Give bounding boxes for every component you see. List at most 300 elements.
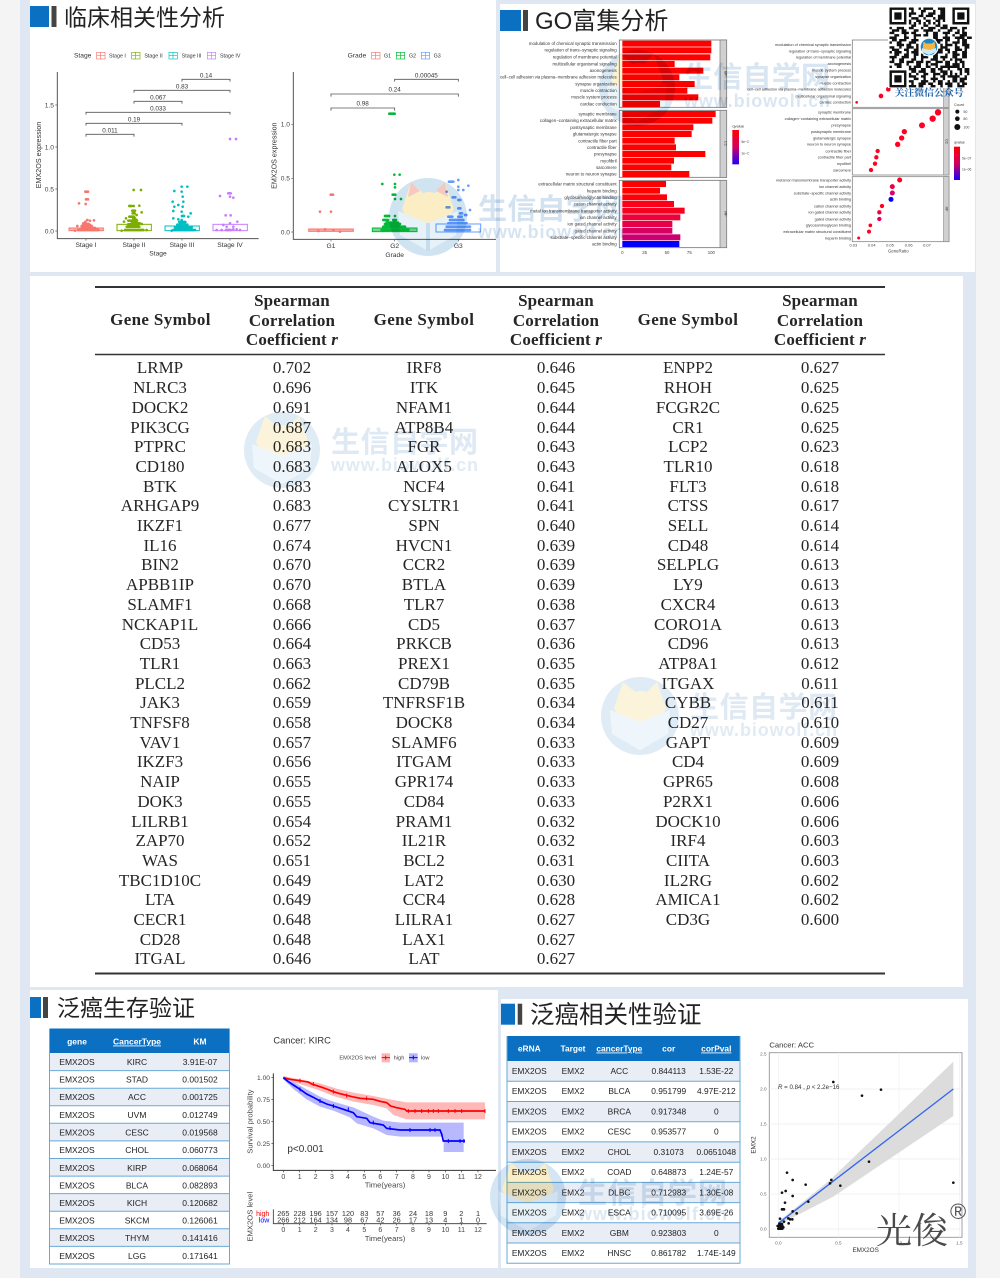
legend: expression level: EMX2OS level xyxy=(339,1056,376,1062)
table: Spearman correlation of EMX2OS genes: CD3G xyxy=(666,910,710,929)
table: Spearman correlation of EMX2OS genes: 0.627 xyxy=(537,910,575,929)
table: survival KM p values: 0.001725 xyxy=(182,1092,218,1102)
table: Spearman correlation of EMX2OS genes: 0.648 xyxy=(273,930,311,949)
chart: GO bar plot: 50 xyxy=(665,250,670,255)
table: eRNA target correlation: 0.923803 xyxy=(651,1228,687,1238)
chart: ACC scatter plot: EMX2 xyxy=(751,1136,758,1154)
table: eRNA target correlation: CHOL xyxy=(608,1147,631,1157)
table: Spearman correlation of EMX2OS genes: CYSLTR1 xyxy=(388,496,460,515)
risk table: 157 xyxy=(326,1209,338,1218)
table: Spearman correlation of EMX2OS genes: Gene Symbol xyxy=(110,310,211,329)
risk table: 5 xyxy=(362,1227,366,1234)
table: Spearman correlation of EMX2OS genes: TLR7 xyxy=(404,595,444,614)
bar labels: regulation of trans−synaptic signaling xyxy=(545,48,617,53)
strip labels: MF xyxy=(724,211,728,217)
risk table xyxy=(245,1191,487,1243)
table: Spearman correlation of EMX2OS genes: 0.638 xyxy=(537,595,575,614)
table: Spearman correlation of EMX2OS genes: 0.633 xyxy=(537,733,575,752)
chart: KIRC survival curve: 12 xyxy=(474,1174,482,1181)
table: eRNA target correlation: Target xyxy=(561,1044,586,1054)
table: Spearman correlation of EMX2OS genes: 0.609 xyxy=(801,752,839,771)
table: survival KM p values: ACC xyxy=(128,1092,146,1102)
curve: low xyxy=(283,1078,465,1141)
risk table: 18 xyxy=(425,1209,433,1218)
QR code xyxy=(888,6,972,99)
table: Spearman correlation of EMX2OS genes: 0.613 xyxy=(801,555,839,574)
table: Spearman correlation of EMX2OS genes: PIK3CG xyxy=(130,418,190,436)
table: Spearman correlation of EMX2OS genes: 0.611 xyxy=(801,674,839,693)
table: Spearman correlation of EMX2OS genes: ATP8A1 xyxy=(658,654,718,673)
table: Spearman correlation of EMX2OS genes: CCR2 xyxy=(403,555,445,574)
table: Spearman correlation of EMX2OS genes: JAK3 xyxy=(140,693,180,712)
risk table: Time(years) xyxy=(365,1234,406,1243)
table: eRNA target correlation: EMX2OS xyxy=(512,1248,547,1258)
table: Spearman correlation of EMX2OS genes: SELPLG xyxy=(657,555,719,574)
table: eRNA target correlation: EMX2 xyxy=(562,1187,585,1197)
chart: ACC scatter plot: 1.0 xyxy=(896,1240,903,1245)
chart: ACC scatter plot: EMX2OS xyxy=(852,1247,879,1254)
chart: EMX2OS expression by stage: 0.19 xyxy=(128,117,141,124)
table: eRNA target correlation: cancerType xyxy=(596,1044,643,1054)
dot labels: synaptic membrane xyxy=(818,111,851,115)
table: survival KM p values: EMX2OS xyxy=(59,1198,95,1208)
table: Spearman correlation of EMX2OS genes: 0.634 xyxy=(537,713,575,732)
table: Spearman correlation of EMX2OS genes: ALOX5 xyxy=(396,457,452,476)
table: survival KM p values: EMX2OS xyxy=(59,1128,95,1138)
bars: biological process xyxy=(622,41,711,107)
table: eRNA target correlation: COAD xyxy=(607,1167,631,1177)
table: Spearman correlation of EMX2OS genes: LY9 xyxy=(673,575,703,594)
table: Spearman correlation of EMX2OS genes: 0.655 xyxy=(273,772,311,791)
table: eRNA target correlation: 0.953577 xyxy=(651,1127,687,1137)
table: Spearman correlation of EMX2OS genes: 0.613 xyxy=(801,634,839,653)
dot labels: contractile fiber part xyxy=(818,156,852,160)
bar labels: myofibril xyxy=(600,158,617,163)
table: eRNA target correlation: eRNA xyxy=(518,1044,541,1054)
risk table: 3 xyxy=(330,1227,334,1234)
table: Spearman correlation of EMX2OS genes: IL21R xyxy=(402,831,446,850)
legend: count: Count xyxy=(954,103,964,107)
chart: ACC scatter plot: Cancer: ACC xyxy=(769,1041,814,1050)
dot labels: axonogenesis xyxy=(828,62,851,66)
table: Spearman correlation of EMX2OS genes: RHOH xyxy=(664,378,712,397)
chart: GO dot plot: 0.06 xyxy=(905,243,913,248)
chart: KIRC survival curve: 0.50 xyxy=(257,1119,270,1126)
heading: pan-cancer survival: 泛癌生存验证 xyxy=(57,995,195,1021)
table: Spearman correlation of EMX2OS genes: 0.658 xyxy=(273,713,311,732)
table: Spearman correlation of EMX2OS genes: 0.657 xyxy=(273,733,311,752)
table: Spearman correlation of EMX2OS genes: 0.646 xyxy=(273,949,311,968)
table: Spearman correlation of EMX2OS genes: NCF4 xyxy=(403,477,445,496)
table: Spearman correlation of EMX2OS genes: Correlation xyxy=(249,311,335,330)
chart: ACC scatter plot xyxy=(751,1041,963,1254)
table: eRNA target correlation: 0.861782 xyxy=(651,1248,687,1258)
bar labels: muscle system process xyxy=(571,95,617,100)
table: Spearman correlation of EMX2OS genes: 0.648 xyxy=(273,910,311,929)
table: survival KM p values: CESC xyxy=(125,1128,149,1138)
legend: count: 80 xyxy=(963,117,967,121)
watermark: top right: www.biowolf.cn xyxy=(683,91,830,111)
table: Spearman correlation of EMX2OS genes: 0.637 xyxy=(537,615,575,634)
table: eRNA target correlation: 0.648873 xyxy=(651,1167,687,1177)
icon: QR centre logo xyxy=(920,38,938,56)
table: Spearman correlation of EMX2OS genes: P2RX1 xyxy=(663,792,713,811)
table: Spearman correlation of EMX2OS genes: Coefficient r xyxy=(246,330,338,349)
bar labels: contractile fiber xyxy=(587,145,617,150)
dot labels xyxy=(747,43,852,240)
chart: EMX2OS expression by stage xyxy=(35,52,259,258)
table: survival KM p values: 0.001502 xyxy=(182,1075,218,1085)
table: Spearman correlation of EMX2OS genes: 0.677 xyxy=(273,516,311,535)
table: Spearman correlation of EMX2OS genes: FGR xyxy=(407,437,441,456)
risk table: 98 xyxy=(344,1216,352,1225)
legend: count: 50 xyxy=(963,110,967,114)
legend: qvalue xyxy=(954,141,971,180)
risk table: 36 xyxy=(393,1209,401,1218)
risk table: low xyxy=(259,1217,270,1224)
table: Spearman correlation of EMX2OS genes: TNFSF8 xyxy=(130,713,190,732)
table: Spearman correlation of EMX2OS genes: 0.630 xyxy=(537,871,575,890)
table: eRNA target correlation xyxy=(507,1036,740,1264)
table: eRNA target correlation: EMX2 xyxy=(562,1066,585,1076)
watermark: clinical chart xyxy=(389,178,624,256)
legend: qvalue: qvalue xyxy=(954,141,965,145)
table: eRNA target correlation: 1.53E-22 xyxy=(699,1066,734,1076)
chart: KIRC survival curve: 1.00 xyxy=(257,1075,270,1082)
curve: high xyxy=(283,1078,485,1111)
table: Spearman correlation of EMX2OS genes: BTLA xyxy=(402,575,446,594)
table: Spearman correlation of EMX2OS genes: LRMP xyxy=(137,358,183,377)
dot labels: ion gated channel activity xyxy=(809,211,851,215)
chart: ACC scatter plot: 2.0 xyxy=(760,1087,767,1092)
confidence bands xyxy=(283,1076,485,1119)
risk table: 0 xyxy=(476,1216,480,1225)
chart: EMX2OS expression by stage: EMX2OS expression xyxy=(35,122,43,188)
bar labels: cation channel activity xyxy=(574,202,617,207)
bar labels: extracellular matrix structural constituent xyxy=(538,181,617,186)
table: survival KM p values: EMX2OS xyxy=(59,1180,95,1190)
table: survival KM p values: EMX2OS xyxy=(59,1145,95,1155)
chart: EMX2OS expression by stage: 0.0 xyxy=(45,228,54,235)
table: Spearman correlation of EMX2OS genes: ITK xyxy=(410,378,438,397)
table: Spearman correlation of EMX2OS genes: 0.612 xyxy=(801,654,839,673)
table: Spearman correlation of EMX2OS genes: CD27 xyxy=(668,713,708,732)
panel: clinical correlation analysis xyxy=(30,0,496,272)
chart: EMX2OS expression by stage: 0.011 xyxy=(102,128,118,135)
legend: stage: Stage II xyxy=(144,54,163,60)
chart: KIRC survival curve: 5 xyxy=(362,1174,366,1181)
chart: KIRC survival curve: 0.00 xyxy=(257,1163,270,1170)
dot labels: glutamatergic synapse xyxy=(813,136,851,140)
table: Spearman correlation of EMX2OS genes: CD180 xyxy=(135,457,185,476)
table: survival KM p values: 0.141416 xyxy=(182,1233,218,1243)
table: Spearman correlation of EMX2OS genes: 0.651 xyxy=(273,851,311,870)
bar labels: muscle contraction xyxy=(580,88,617,93)
table: survival KM p values: 0.126061 xyxy=(182,1216,218,1226)
watermark: table lower xyxy=(601,677,837,755)
table: Spearman correlation of EMX2OS genes: 0.649 xyxy=(273,871,311,890)
chart: ACC scatter plot: 2.5 xyxy=(760,1051,767,1056)
table: Spearman correlation of EMX2OS genes: SLAMF6 xyxy=(391,733,457,752)
table: Spearman correlation of EMX2OS genes: 0.613 xyxy=(801,575,839,594)
watermark: top right xyxy=(599,50,830,126)
table: Spearman correlation of EMX2OS genes: PLCL2 xyxy=(135,674,185,693)
table: Spearman correlation of EMX2OS genes: 0.659 xyxy=(273,693,311,712)
table: Spearman correlation of EMX2OS genes: SPN xyxy=(408,516,440,535)
caption: follow WeChat: 关注微信公众号 xyxy=(894,85,964,99)
chart: ACC scatter plot: 0.5 xyxy=(835,1240,842,1245)
chart: EMX2OS expression by grade: Grade xyxy=(385,252,404,259)
table: survival KM p values: 0.060773 xyxy=(182,1145,218,1155)
table: survival KM p values: THYM xyxy=(125,1233,149,1243)
table: Spearman correlation of EMX2OS genes: IL16 xyxy=(143,536,177,555)
legend: expression level: low xyxy=(421,1056,430,1062)
table: Spearman correlation of EMX2OS genes: 0.635 xyxy=(537,654,575,673)
risk table: 57 xyxy=(376,1209,384,1218)
table: Spearman correlation of EMX2OS genes: 0.646 xyxy=(537,358,575,377)
chart: GO dot plot xyxy=(747,40,971,253)
legend: grade: Grade xyxy=(348,53,366,60)
table: Spearman correlation of EMX2OS genes: SLAMF1 xyxy=(127,595,193,614)
signature: Guangjun: ® xyxy=(950,1199,966,1224)
table: Spearman correlation of EMX2OS genes: 0.683 xyxy=(273,477,311,496)
risk table: 120 xyxy=(342,1209,354,1218)
risk table: 2 xyxy=(459,1209,463,1218)
table: survival KM p values: 0.082893 xyxy=(182,1180,218,1190)
table: Spearman correlation of EMX2OS genes: LAT xyxy=(408,949,440,968)
dot labels: presynapse xyxy=(831,124,851,128)
chart: ACC scatter plot: R = 0.84 , p < 2.2e−16 xyxy=(778,1084,840,1091)
bar labels: neuron to neuron synapse xyxy=(566,172,617,177)
table: Spearman correlation of EMX2OS genes: 0.602 xyxy=(801,890,839,909)
watermark: clinical chart: www.biowolf.cn xyxy=(477,222,624,242)
table: Spearman correlation of EMX2OS genes: Spearman xyxy=(254,291,330,310)
table: eRNA target correlation: cor xyxy=(662,1044,676,1054)
table: eRNA target correlation: 0 xyxy=(714,1127,719,1137)
chart: KIRC survival curve: 8 xyxy=(411,1174,415,1181)
table: survival KM p values xyxy=(49,1028,230,1264)
table: Spearman correlation of EMX2OS genes: 0.639 xyxy=(537,536,575,555)
bar labels: cardiac conduction xyxy=(580,101,617,106)
table: Spearman correlation of EMX2OS genes: LCP2 xyxy=(668,437,708,456)
dot labels: cation channel activity xyxy=(814,204,851,208)
table: Spearman correlation of EMX2OS genes: LILRA1 xyxy=(395,910,453,929)
table: Spearman correlation of EMX2OS genes: Coefficient r xyxy=(774,330,866,349)
chart: ACC scatter plot: 0.0 xyxy=(760,1227,767,1232)
table: Spearman correlation of EMX2OS genes: NLRC3 xyxy=(133,378,187,397)
table: eRNA target correlation: 4.97E-212 xyxy=(697,1086,736,1096)
table: Spearman correlation of EMX2OS genes: CD48 xyxy=(668,536,708,555)
dot labels: neuron to neuron synapse xyxy=(807,143,851,147)
table: Spearman correlation of EMX2OS genes: IRF8 xyxy=(407,358,441,377)
table: Spearman correlation of EMX2OS genes: IKZF1 xyxy=(137,516,183,535)
table: Spearman correlation of EMX2OS genes: 0.631 xyxy=(537,851,575,870)
risk table: 265 xyxy=(277,1209,289,1218)
table: Spearman correlation of EMX2OS genes: LILRB1 xyxy=(131,812,189,831)
table: Spearman correlation of EMX2OS genes: 0.702 xyxy=(273,358,311,377)
chart: KIRC survival curve: 4 xyxy=(346,1174,350,1181)
panel: pan-cancer survival validation xyxy=(30,990,498,1268)
table: Spearman correlation of EMX2OS genes: 0.641 xyxy=(537,496,575,515)
table: Spearman correlation of EMX2OS genes: CD79B xyxy=(398,674,450,693)
table: eRNA target correlation: EMX2OS xyxy=(512,1228,547,1238)
table: Spearman correlation of EMX2OS genes: 0.666 xyxy=(273,615,311,634)
table: Spearman correlation of EMX2OS genes xyxy=(110,291,866,968)
table: Spearman correlation of EMX2OS genes: 0.625 xyxy=(801,378,839,397)
table: Spearman correlation of EMX2OS genes: TLR1 xyxy=(140,654,180,673)
table: survival KM p values: EMX2OS xyxy=(59,1057,95,1067)
table: survival KM p values: EMX2OS xyxy=(59,1251,95,1261)
table: eRNA target correlation: EMX2OS xyxy=(512,1066,547,1076)
table: Spearman correlation of EMX2OS genes: 0.611 xyxy=(801,693,839,712)
watermark: table upper: 生信自学网 xyxy=(331,426,478,459)
watermark: top right: 生信自学网 xyxy=(684,61,830,94)
table: eRNA target correlation: CESC xyxy=(608,1127,631,1137)
scatter points xyxy=(778,1082,953,1229)
chart: EMX2OS expression by grade: 0.98 xyxy=(356,101,369,108)
chart: GO bar plot: 25 xyxy=(642,250,648,255)
table: Spearman correlation of EMX2OS genes: 0.683 xyxy=(273,437,311,456)
bar labels: contractile fiber part xyxy=(578,138,617,143)
table: Spearman correlation of EMX2OS genes: 0.663 xyxy=(273,654,311,673)
chart: GO dot plot: 0.04 xyxy=(868,243,876,248)
table: Spearman correlation of EMX2OS genes: 0.625 xyxy=(801,418,839,436)
watermark: table upper xyxy=(244,412,478,488)
table: Spearman correlation of EMX2OS genes: 0.635 xyxy=(537,674,575,693)
table: Spearman correlation of EMX2OS genes: 0.683 xyxy=(273,457,311,476)
bar labels xyxy=(500,41,617,247)
table: survival KM p values: EMX2OS xyxy=(59,1233,95,1243)
table: Spearman correlation of EMX2OS genes: Spearman xyxy=(782,291,858,310)
table: Spearman correlation of EMX2OS genes: LTA xyxy=(145,890,175,909)
risk table: 1 xyxy=(298,1227,302,1234)
chart: EMX2OS expression by grade: 0.5 xyxy=(281,176,290,183)
table: Spearman correlation of EMX2OS genes: CR1 xyxy=(672,418,704,436)
table: Spearman correlation of EMX2OS genes: BCL2 xyxy=(403,851,445,870)
chart: KIRC survival curve: 3 xyxy=(330,1174,334,1181)
table: Spearman correlation of EMX2OS genes: 0.655 xyxy=(273,792,311,811)
table: Spearman correlation of EMX2OS genes: IL2RG xyxy=(664,871,712,890)
table: Spearman correlation of EMX2OS genes: 0.643 xyxy=(537,437,575,456)
table: Spearman correlation of EMX2OS genes: LAT2 xyxy=(404,871,444,890)
watermark: bottom table xyxy=(490,1159,727,1235)
bar labels: synapse organization xyxy=(575,81,617,86)
legend: expression level: high xyxy=(394,1056,404,1062)
bar labels: glycosaminoglycan binding xyxy=(564,195,617,200)
bar labels: glutamatergic synapse xyxy=(573,132,617,137)
bars: cellular component xyxy=(622,111,716,177)
table: Spearman correlation of EMX2OS genes: CCR4 xyxy=(403,890,445,909)
legend: qvalue: 1e−06 xyxy=(962,168,971,172)
table: eRNA target correlation: EMX2OS xyxy=(512,1167,547,1177)
legend: stage xyxy=(74,52,241,60)
table: Spearman correlation of EMX2OS genes: CXCR4 xyxy=(661,595,715,614)
table: survival KM p values: gene xyxy=(67,1036,87,1046)
table: eRNA target correlation: EMX2OS xyxy=(512,1106,547,1116)
legend: stage: Stage xyxy=(74,53,92,60)
table: survival KM p values: KIRP xyxy=(127,1163,147,1173)
table: Spearman correlation of EMX2OS genes: LAX1 xyxy=(402,930,446,949)
table: survival KM p values: STAD xyxy=(126,1075,148,1085)
table: eRNA target correlation: EMX2OS xyxy=(512,1127,547,1137)
chart: EMX2OS expression by stage: Stage IV xyxy=(217,242,243,249)
table: eRNA target correlation: 0.712983 xyxy=(651,1187,687,1197)
strip labels: CC xyxy=(724,141,728,147)
bar labels: synaptic membrane xyxy=(578,111,617,116)
table: eRNA target correlation: 3.69E-26 xyxy=(699,1208,734,1218)
table: Spearman correlation of EMX2OS genes: 0.634 xyxy=(537,693,575,712)
strip labels xyxy=(724,71,728,217)
chart: KIRC survival curve: 11 xyxy=(458,1174,465,1181)
table: Spearman correlation of EMX2OS genes: CD53 xyxy=(140,634,180,653)
chart: GO bar plot: 100 xyxy=(708,250,716,255)
chart: EMX2OS expression by grade: G1 xyxy=(327,243,336,250)
table: Spearman correlation of EMX2OS genes: CYBB xyxy=(665,693,711,712)
table: Spearman correlation of EMX2OS genes: APBB1IP xyxy=(126,575,194,594)
panel: pan-cancer correlation validation xyxy=(501,999,968,1268)
risk table: 4 xyxy=(443,1216,447,1225)
table: Spearman correlation of EMX2OS genes: 0.691 xyxy=(273,398,311,417)
dot labels: cell−cell adhesion via plasma−membrane adhesion molecules xyxy=(747,88,851,92)
dot labels: muscle system process xyxy=(812,68,851,72)
risk table: 4 xyxy=(346,1227,350,1234)
chart: KIRC survival curve: Time(years) xyxy=(365,1181,406,1190)
risk table: 13 xyxy=(425,1216,433,1225)
table: survival KM p values: 0.019568 xyxy=(182,1128,218,1138)
table: Spearman correlation of EMX2OS genes: 0.627 xyxy=(801,358,839,377)
table: Spearman correlation of EMX2OS genes: 0.641 xyxy=(537,477,575,496)
bar labels: modulation of chemical synaptic transmission xyxy=(529,41,617,46)
table: eRNA target correlation: ESCA xyxy=(608,1208,631,1218)
chart: EMX2OS expression by stage: 0.033 xyxy=(150,106,166,113)
table: Spearman correlation of EMX2OS genes: 0.668 xyxy=(273,595,311,614)
bar labels: heparin binding xyxy=(587,188,617,193)
bars: molecular function xyxy=(622,181,685,247)
table: Spearman correlation of EMX2OS genes: 0.623 xyxy=(801,437,839,456)
chart: KIRC survival curve: 9 xyxy=(427,1174,431,1181)
table: Spearman correlation of EMX2OS genes: ZAP70 xyxy=(135,831,185,850)
chart: KIRC survival curve: Survival probability xyxy=(245,1089,254,1154)
table: Spearman correlation of EMX2OS genes: CECR1 xyxy=(134,910,186,929)
chart: EMX2OS expression by grade: G2 xyxy=(390,243,399,250)
table: Spearman correlation of EMX2OS genes: CIITA xyxy=(666,851,710,870)
table: survival KM p values: CHOL xyxy=(125,1145,149,1155)
table: eRNA target correlation: 0 xyxy=(714,1106,719,1116)
table: Spearman correlation of EMX2OS genes: 0.664 xyxy=(273,634,311,653)
table: eRNA target correlation: BRCA xyxy=(608,1106,631,1116)
chart: EMX2OS expression by stage: 1.0 xyxy=(45,144,54,151)
table: Spearman correlation of EMX2OS genes: 0.606 xyxy=(801,812,839,831)
watermark: bottom table: 生信自学网 xyxy=(578,1177,727,1210)
table: Spearman correlation of EMX2OS genes: GPR174 xyxy=(395,772,453,791)
chart: GO bar plot xyxy=(500,40,750,255)
table: Spearman correlation of EMX2OS genes: 0.683 xyxy=(273,496,311,515)
table: Spearman correlation of EMX2OS genes: 0.645 xyxy=(537,378,575,397)
table: eRNA target correlation: 1.30E-08 xyxy=(699,1187,734,1197)
table: survival KM p values: EMX2OS xyxy=(59,1075,95,1085)
table: Spearman correlation of EMX2OS genes: 0.627 xyxy=(537,949,575,968)
table: Spearman correlation of EMX2OS genes: 0.633 xyxy=(537,772,575,791)
panel: correlation table xyxy=(30,276,963,987)
table: eRNA target correlation: GBM xyxy=(610,1228,629,1238)
legend: qvalue: 1e−C xyxy=(741,151,750,155)
table: Spearman correlation of EMX2OS genes: 0.633 xyxy=(537,752,575,771)
table: eRNA target correlation: 0.951799 xyxy=(651,1086,687,1096)
table: survival KM p values: CancerType xyxy=(113,1036,161,1046)
table: Spearman correlation of EMX2OS genes: IKZF3 xyxy=(137,752,183,771)
risk table: 8 xyxy=(411,1227,415,1234)
table: Spearman correlation of EMX2OS genes: 0.633 xyxy=(537,792,575,811)
